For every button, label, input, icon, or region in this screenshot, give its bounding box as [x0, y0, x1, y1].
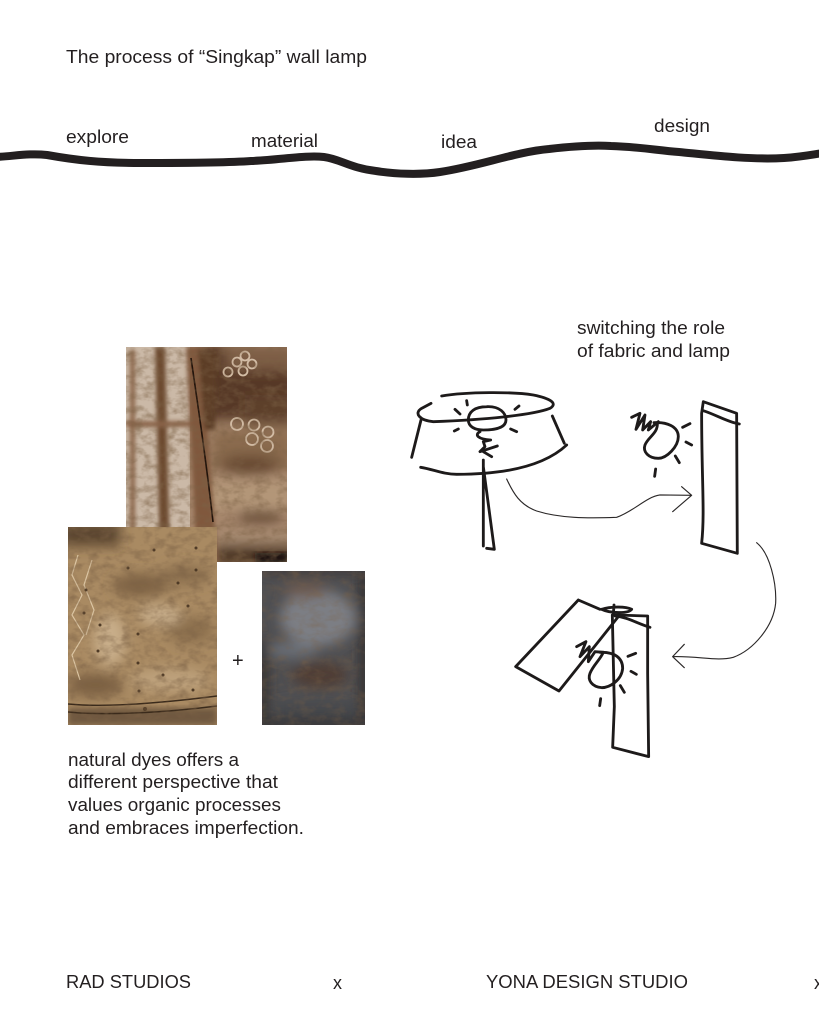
- caption: switching the role: [577, 318, 730, 361]
- footer: separator x: x: [333, 973, 342, 993]
- process timeline wave: [0, 146, 819, 174]
- label: design: design: [654, 116, 710, 136]
- title: The process of “Singkap” wall lamp: [66, 47, 367, 67]
- photo: tie-dyed fabric: [126, 345, 295, 565]
- plus sign: +: [232, 650, 244, 672]
- sketch: fabric draped over bulb: [516, 600, 650, 757]
- arrow: fabric strip to final form: [673, 543, 776, 668]
- sketch: table lamp: [412, 393, 567, 549]
- caption: natural dyes: natural dyes offers a: [68, 750, 240, 770]
- caption: switching the role: switching the role: [577, 318, 725, 338]
- label: explore: explore: [66, 127, 129, 147]
- caption: natural dyes: [68, 750, 304, 838]
- caption: natural dyes: values organic processes: [68, 795, 281, 815]
- arrow: lamp to fabric strip: [507, 479, 692, 518]
- caption: natural dyes: and embraces imperfection.: [68, 818, 304, 838]
- caption: natural dyes: different perspective that: [68, 772, 278, 792]
- sketch: bulb beside fabric strip: [632, 402, 739, 553]
- footer: YONA DESIGN STUDIO: YONA DESIGN STUDIO: [486, 972, 688, 992]
- label: idea: idea: [441, 132, 478, 152]
- caption: switching the role: of fabric and lamp: [577, 341, 730, 361]
- label: material: material: [251, 131, 318, 151]
- footer: RAD STUDIOS: RAD STUDIOS: [66, 972, 191, 992]
- photo: grey patinated texture: [262, 571, 365, 725]
- photo: embroidered fabric: [60, 522, 217, 725]
